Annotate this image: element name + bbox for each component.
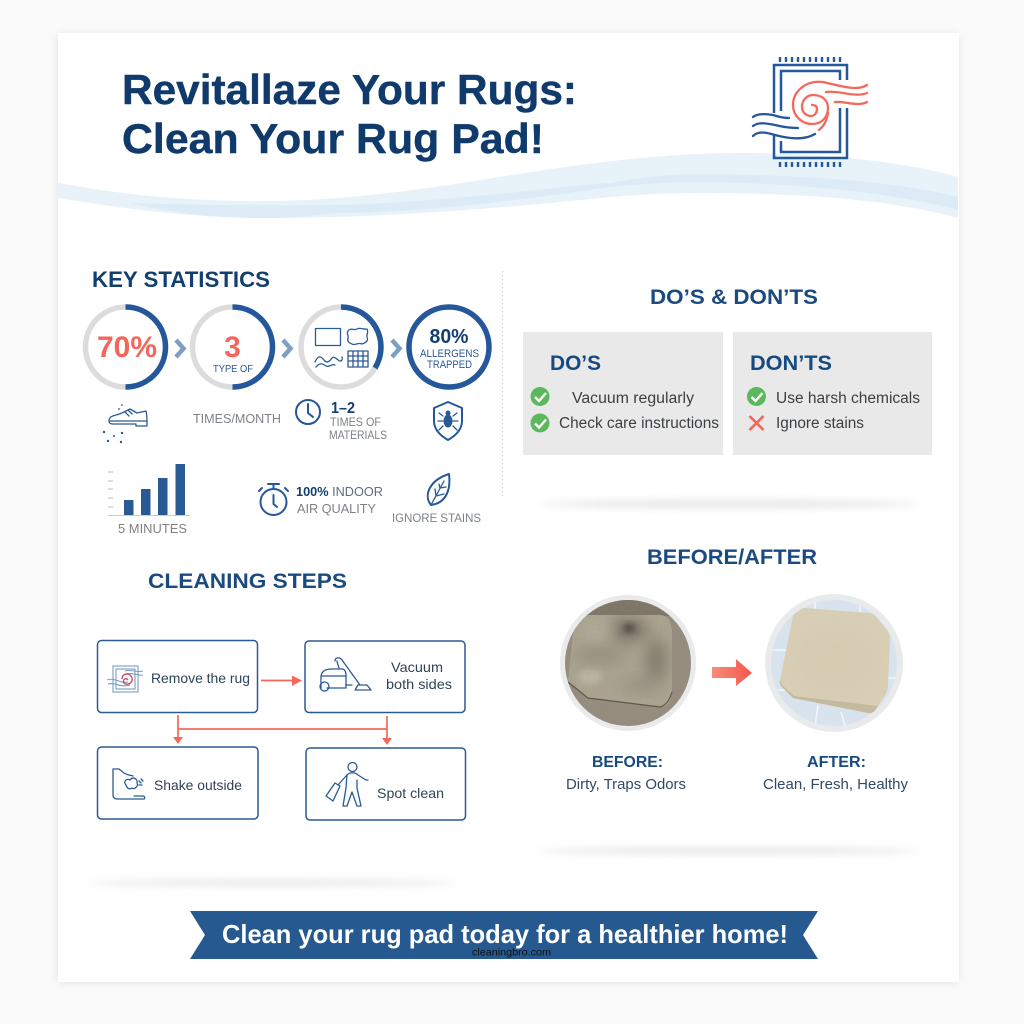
arrow: branching connector [173,715,392,745]
header wave [58,153,958,218]
step: vacuum both sides: Vacuum [391,659,443,675]
heading: key statistics: KEY STATISTICS [92,267,270,292]
stat: 1-2 times of materials: 1–2 [331,400,355,417]
text: ignore stains: Ignore stains [776,415,864,432]
stat: indoor air quality [296,484,383,516]
soft shadow divider [540,848,920,854]
stat ring: 80%: 80% [430,326,469,348]
label: 5 minutes: 5 MINUTES [118,521,187,536]
arrow: step 1 to 2 [261,676,302,686]
step: remove the rug: Remove the rug [151,670,250,686]
stat: 1-2 times of materials: TIMES OF [330,417,381,429]
soft shadow divider [540,501,920,507]
stat ring: 80%: TRAPPED [427,359,472,371]
caption: after [763,754,908,793]
panel: donts [733,332,932,455]
panel: donts: DON’TS [750,352,832,375]
heading: before after: BEFORE/AFTER [647,546,817,569]
title: Revitallaze Your Rugs: [122,66,577,113]
watermark: cleaningbro.com [472,946,551,958]
step: spot clean [306,748,466,820]
stat: 1-2 times of materials: MATERIALS [329,430,387,442]
vertical divider [502,271,504,496]
stat ring: materials [301,307,381,387]
title: Clean Your Rug Pad! [122,115,544,162]
arrow: before to after [712,659,752,686]
icon: check [747,387,766,406]
icon: rug logo [753,57,867,167]
arrow chevron [392,340,400,357]
arrow chevron [176,340,184,357]
step: remove the rug [98,640,258,712]
text: vacuum regularly: Vacuum regularly [572,390,694,407]
caption: after: Clean, Fresh, Healthy [763,776,908,793]
photo: clean rug pad [765,594,903,732]
step: shake outside: Shake outside [154,777,242,793]
caption: before: Dirty, Traps Odors [566,776,686,793]
stat: indoor air quality: AIR QUALITY [297,501,376,516]
icon: stopwatch [259,484,288,515]
icon: leaf [428,474,449,505]
title [122,66,577,162]
caption: before: BEFORE: [592,754,663,771]
step: vacuum both sides: both sides [386,676,452,692]
label: ignore stains: IGNORE STAINS [392,511,481,525]
label: times per month: TIMES/MONTH [193,412,281,426]
stat ring: 80%: ALLERGENS [420,348,479,360]
heading: dos and donts: DO’S & DON’TS [650,286,818,309]
step: spot clean: Spot clean [377,785,444,801]
icon: cross [750,416,764,430]
stat ring: 70%: 70% [97,331,157,364]
icon: shield with bug [434,402,462,440]
text: harsh chemicals: Use harsh chemicals [776,390,920,407]
heading: cleaning steps: CLEANING STEPS [148,569,347,593]
photo: dirty rug pad [560,595,696,731]
icon: check [530,387,550,406]
stat ring: 3: 3 [224,331,241,364]
caption: before [566,754,686,793]
step: shake outside [98,747,258,819]
stat ring: 80% [409,307,489,387]
step: vacuum both sides [305,641,465,712]
stat ring: 3: TYPE OF [213,364,253,375]
arrow chevron [283,340,290,357]
stat: indoor air quality: 100% INDOOR [296,484,383,499]
bar chart [108,464,190,516]
banner: call to action [190,911,818,959]
stat ring: 70% [86,307,166,387]
panel: dos [523,332,723,455]
caption: after: AFTER: [807,754,866,771]
banner: call to action: Clean your rug pad today for a healthier home! [222,919,788,949]
stat ring: 3 [192,307,272,387]
stat: 1-2 times of materials [329,400,387,442]
icon: check [530,414,550,432]
panel: dos: DO’S [550,352,601,375]
icon: shoe with dust [103,404,147,443]
icon: clock [296,400,320,424]
text: check care: Check care instructions [559,415,719,432]
soft shadow divider [87,880,457,886]
